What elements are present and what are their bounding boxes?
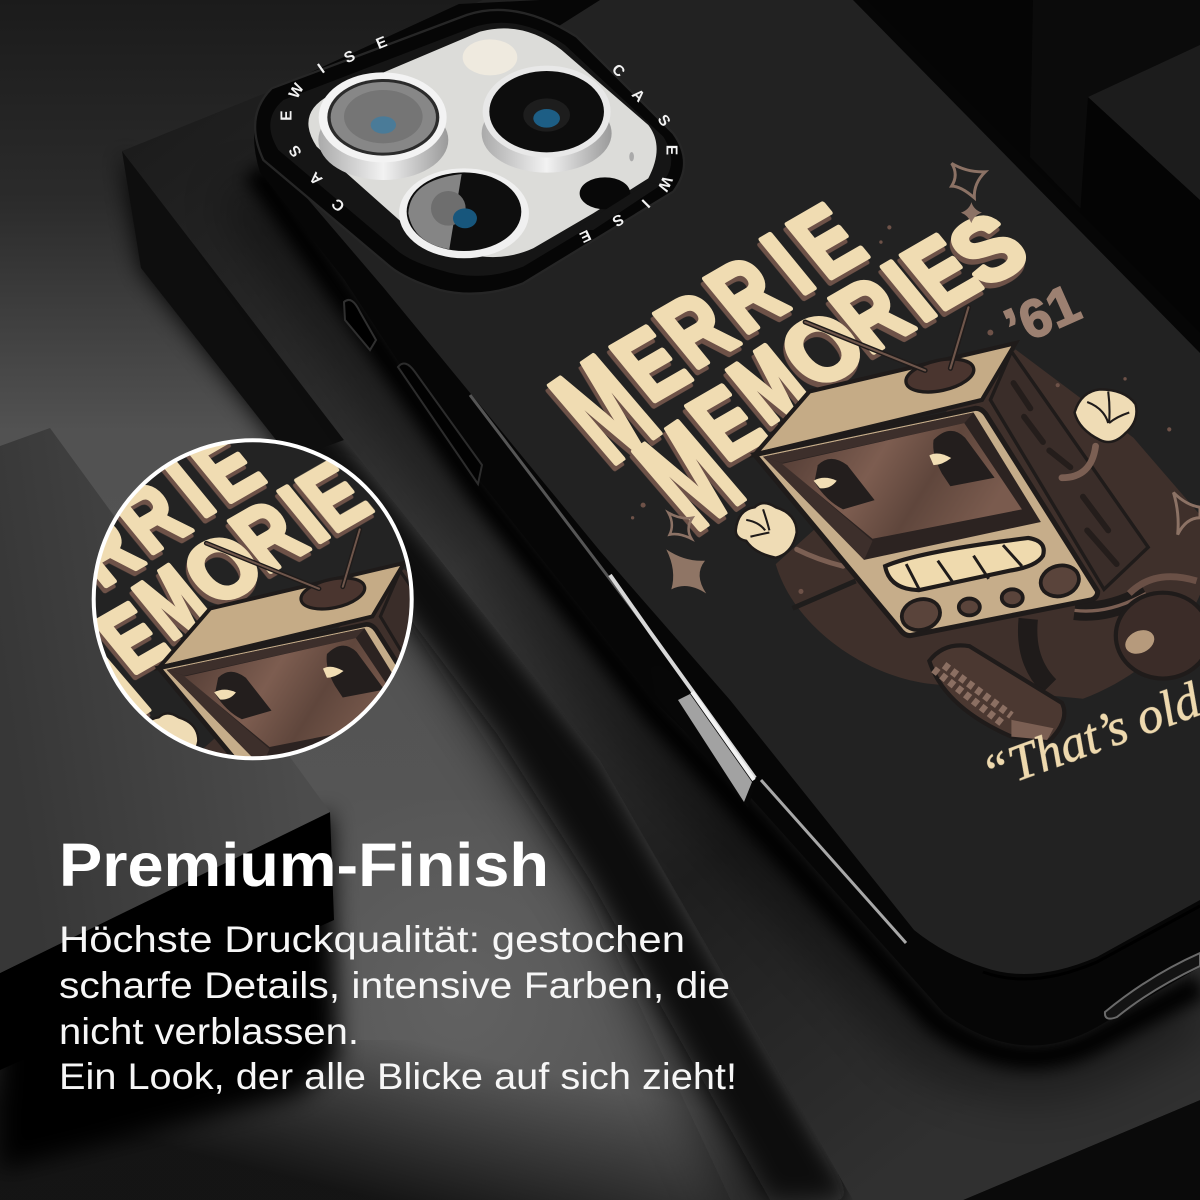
band over microphone (573, 183, 663, 230)
title lettering: I (743, 215, 832, 312)
inset lettering: E (172, 414, 281, 520)
phone case (254, 0, 1200, 1045)
knobs (898, 561, 1082, 634)
inset lettering: E (78, 585, 186, 691)
body text: nicht verblassen. (59, 1011, 359, 1052)
lens right (482, 66, 612, 173)
body text: Höchste Druckqualität: gestochen (59, 919, 685, 960)
inset lettering: I (261, 468, 346, 560)
title lettering: R (811, 257, 930, 371)
charging port (1105, 953, 1200, 1019)
inset lettering (96, 444, 376, 718)
brand text CASEWISE: W (286, 80, 308, 102)
title lettering: E (592, 308, 708, 420)
brand text CASEWISE: E (279, 111, 296, 121)
year '61: ’61 (996, 273, 1089, 358)
inset lettering: R (94, 463, 207, 571)
brand text CASEWISE (279, 33, 680, 246)
inset fist (151, 712, 200, 746)
right fist (1075, 389, 1137, 442)
camera window (308, 28, 657, 257)
brand text CASEWISE: A (628, 86, 648, 106)
TV front (755, 408, 1098, 636)
brand text CASEWISE: C (329, 195, 348, 215)
antenna base (903, 354, 977, 397)
inset TV (154, 527, 409, 756)
brand text CASEWISE: S (286, 142, 306, 160)
glossy case edge (254, 0, 1200, 1045)
edge highlight (470, 395, 1200, 979)
inset lettering: R (47, 496, 159, 604)
side buttons (344, 300, 755, 808)
title lettering (525, 185, 1047, 557)
title lettering: E (769, 185, 884, 297)
brand text CASEWISE: A (306, 168, 326, 188)
brand text CASEWISE: S (609, 210, 627, 230)
inset lettering: E (279, 443, 388, 549)
inset lettering: R (212, 482, 324, 590)
body text: Ein Look, der alle Blicke auf sich zieht! (59, 1056, 737, 1097)
brand text CASEWISE: E (577, 226, 593, 246)
TV top (755, 343, 1016, 455)
left fist (736, 503, 797, 558)
brand text CASEWISE: I (315, 61, 328, 77)
brand text CASEWISE: S (654, 112, 674, 130)
antennas (805, 307, 968, 370)
TV side panel (990, 352, 1148, 589)
title lettering: M (609, 395, 770, 557)
inset lettering: M (21, 611, 173, 764)
title lettering: E (883, 216, 998, 328)
flash (463, 39, 517, 75)
speckles (631, 225, 1171, 594)
arms (1062, 446, 1096, 478)
title lettering: I (864, 242, 953, 340)
brand text CASEWISE: C (608, 61, 628, 81)
heading: Premium-Finish (59, 831, 549, 899)
title lettering: O (760, 292, 886, 407)
brown disc (776, 349, 1200, 699)
body text (59, 919, 737, 1097)
brand text CASEWISE: S (342, 47, 358, 67)
title lettering: M (525, 329, 686, 491)
phone shadow (240, 170, 1200, 1075)
title lettering: R (636, 272, 755, 387)
stars (666, 163, 1200, 594)
title lettering: E (668, 366, 784, 479)
TV screen (763, 413, 1041, 560)
mouth (885, 538, 1044, 590)
brand text CASEWISE: E (374, 33, 390, 53)
lens left (318, 72, 448, 180)
legs and shoes (929, 577, 1200, 741)
artwork: Merrie Memories TV (525, 163, 1200, 802)
brand text CASEWISE: W (654, 173, 675, 194)
brand text CASEWISE: E (663, 145, 680, 155)
body text: scharfe Details, intensive Farben, die (59, 965, 730, 1006)
title lettering: R (686, 237, 805, 352)
inset lettering: M (117, 547, 227, 657)
inset lettering: O (164, 516, 282, 624)
zoom inset circle (92, 438, 414, 760)
camera plate (255, 10, 684, 294)
lens bottom (399, 168, 529, 258)
matte back (300, 0, 1200, 974)
title lettering: S (930, 195, 1047, 305)
text band (270, 23, 671, 276)
inset lettering: I (148, 443, 232, 534)
inset artwork (96, 444, 410, 756)
title lettering: M (710, 327, 827, 444)
microphone hole (580, 177, 630, 209)
brand text CASEWISE: I (638, 196, 653, 211)
eyes (814, 431, 995, 509)
